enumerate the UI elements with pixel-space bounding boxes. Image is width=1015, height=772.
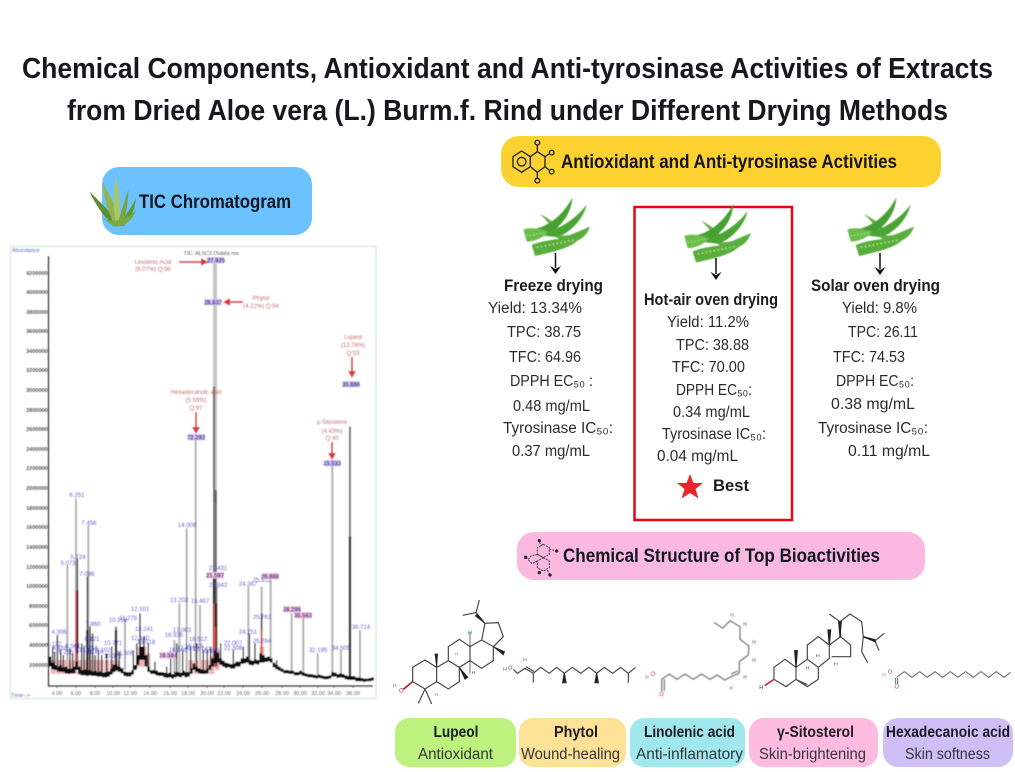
dense peak label clusters: 9.102 xyxy=(95,648,111,654)
peak labels: 10.771 xyxy=(104,641,123,647)
structure: phytol: H xyxy=(503,667,507,673)
dense peak label clusters: 18.015 xyxy=(185,644,204,650)
structure: linolenic acid: H xyxy=(743,622,747,628)
dense peak label clusters: 5.561 xyxy=(65,644,81,650)
peak labels: 25.784 xyxy=(253,639,272,645)
compound annotations: (4.43%) xyxy=(321,429,343,435)
panel: solar oven drying xyxy=(811,197,940,460)
peak labels: 12.101 xyxy=(131,607,150,613)
title xyxy=(22,53,993,127)
structure: lupeol: H xyxy=(468,630,472,636)
structure: linolenic acid: H xyxy=(729,686,733,692)
highlighted peak labels: 35.886 xyxy=(342,382,361,388)
compound annotations xyxy=(135,260,365,442)
panel: solar oven drying: TPC: 26.11 xyxy=(848,324,918,341)
card: gamma-sitosterol xyxy=(749,718,878,767)
chart: TIC chromatogram: 1800000 xyxy=(26,506,48,512)
compound annotations: (13.78%) xyxy=(341,343,365,349)
peak labels: 11.278 xyxy=(119,616,138,622)
chart: TIC chromatogram: 24.00 xyxy=(236,691,250,697)
highlighted peak labels: 30.563 xyxy=(294,614,313,620)
chart: TIC chromatogram: 22.00 xyxy=(217,691,231,697)
structure: linolenic acid: H xyxy=(752,640,756,646)
icon: molecule xyxy=(513,140,554,183)
structure: lupeol xyxy=(393,600,505,704)
dense peak label clusters xyxy=(46,636,243,660)
chart: TIC chromatogram: 8.00 xyxy=(90,691,100,697)
compound annotations: Q:40 xyxy=(325,436,339,442)
structure: linolenic acid: H xyxy=(730,613,734,619)
dense peak label clusters: 16.240 xyxy=(169,648,188,654)
peak labels: 15.467 xyxy=(191,599,210,605)
panel: solar oven drying: TFC: 74.53 xyxy=(833,349,905,366)
card: gamma-sitosterol: Skin-brightening xyxy=(759,746,866,763)
structure: gamma-sitosterol: H xyxy=(806,665,810,671)
compound annotations: Lupeol xyxy=(344,335,362,341)
panel: freeze drying: TPC: 38.75 xyxy=(507,324,581,341)
panel: freeze drying xyxy=(488,197,613,460)
chart: TIC chromatogram: 16.00 xyxy=(163,691,177,697)
dense peak label clusters: 12.640 xyxy=(131,636,150,642)
chart: TIC chromatogram: 32.00 xyxy=(311,691,325,697)
chart: TIC chromatogram: 2800000 xyxy=(26,408,48,414)
peak labels: 25.812 xyxy=(253,578,272,584)
structure: phytol xyxy=(503,658,636,683)
peak labels xyxy=(51,493,371,654)
peak labels: 21.431 xyxy=(209,566,228,572)
dense peak label clusters: 11.506 xyxy=(116,651,135,657)
chart: TIC chromatogram: 2400000 xyxy=(26,447,48,453)
icon: polycyclic structure xyxy=(524,539,558,577)
card: phytol: Phytol xyxy=(554,724,598,741)
structure: gamma-sitosterol: H xyxy=(816,653,820,659)
chart: TIC chromatogram: 10.00 xyxy=(106,691,120,697)
chart: TIC chromatogram: 18.00 xyxy=(181,691,195,697)
panel: TIC chromatogram heading xyxy=(89,167,312,235)
highlighted peak labels: 72.293 xyxy=(187,436,206,442)
chart: TIC chromatogram: 4200000 xyxy=(26,271,48,277)
compound annotations: γ-Sitosterol xyxy=(317,420,347,426)
icon: aloe slices xyxy=(684,204,751,262)
chart: TIC chromatogram: 3400000 xyxy=(26,349,48,355)
peak labels: 10.158 xyxy=(109,618,128,624)
compound annotations: (5.55%) xyxy=(185,398,207,404)
card: linolenic acid xyxy=(630,718,745,767)
structure: hexadecanoic acid: O xyxy=(894,685,899,691)
dense peak label clusters: 4.132 xyxy=(46,642,62,648)
structure: hexadecanoic acid xyxy=(882,669,1011,691)
chart: TIC chromatogram: 3600000 xyxy=(26,329,48,335)
chart: TIC chromatogram: 3000000 xyxy=(26,388,48,394)
card: hexadecanoic acid: Skin softness xyxy=(905,746,990,763)
panel: chemical structure heading: Chemical Structure of Top Bioactivities xyxy=(563,546,880,567)
structure: linolenic acid xyxy=(645,613,756,698)
chart: TIC chromatogram: 26.00 xyxy=(255,691,269,697)
dense peak label clusters: 6.814 xyxy=(74,648,90,654)
panel: solar oven drying: 0.38 mg/mL xyxy=(831,396,915,413)
chart: TIC chromatogram: 400000 xyxy=(29,643,48,649)
structure: hexadecanoic acid: H xyxy=(882,673,886,678)
dense peak label clusters: 4.458 xyxy=(52,646,68,652)
peak labels: 8.121 xyxy=(84,637,100,643)
structure: lupeol: H xyxy=(472,670,475,675)
panel: freeze drying: Tyrosinase IC₅₀: xyxy=(503,420,613,437)
compound annotations: (4.22%) Q:94 xyxy=(243,304,280,310)
compound annotations: Q:53 xyxy=(346,351,360,357)
annotation arrows xyxy=(179,258,356,460)
structure: hexadecanoic acid: O xyxy=(888,669,893,675)
chart: TIC chromatogram: Abundance xyxy=(12,248,40,254)
peak labels: 34.505 xyxy=(332,646,351,652)
compound annotations: Hexadecanoic acid xyxy=(171,390,221,396)
chart: TIC chromatogram xyxy=(10,246,376,699)
chart: TIC chromatogram: 200000 xyxy=(29,663,48,669)
peak labels: 13.203 xyxy=(170,598,189,604)
peak labels: 21.842 xyxy=(209,583,228,589)
title: from Dried Aloe vera (L.) Burm.f. Rind under Different Drying Methods xyxy=(67,95,948,127)
chart: TIC chromatogram: 14.00 xyxy=(143,691,157,697)
highlighted peak labels: 27.925 xyxy=(207,258,226,264)
chart: TIC chromatogram: 1600000 xyxy=(26,525,48,531)
arrow xyxy=(550,253,561,274)
peak labels: 16.835 xyxy=(165,633,184,639)
chart: TIC chromatogram: 4000000 xyxy=(26,290,48,296)
panel: TIC chromatogram heading: TIC Chromatogram xyxy=(139,192,291,213)
chart: TIC chromatogram: 600000 xyxy=(29,623,48,629)
panel: freeze drying: 0.48 mg/mL xyxy=(513,398,590,415)
dense peak label clusters: 18.742 xyxy=(193,647,212,653)
card: phytol xyxy=(519,718,626,767)
panel: freeze drying: TFC: 64.96 xyxy=(509,349,581,366)
card: lupeol: Lupeol xyxy=(434,724,478,741)
panel: solar oven drying: 0.11 mg/mL xyxy=(848,443,930,460)
compound annotations: Linolenic Acid xyxy=(135,260,171,266)
panel: solar oven drying: Tyrosinase IC₅₀: xyxy=(818,420,928,437)
structure: linolenic acid: H xyxy=(743,675,747,681)
structure: gamma-sitosterol xyxy=(759,614,884,691)
structure: lupeol: H xyxy=(393,684,397,690)
chart: TIC chromatogram: 1400000 xyxy=(26,545,48,551)
panel: hot-air oven drying (best): TPC: 38.88 xyxy=(676,337,749,354)
highlighted peak labels: 21.597 xyxy=(206,574,225,580)
highlighted peak labels: 19.584 xyxy=(159,654,178,660)
chart: TIC chromatogram: 34.00 xyxy=(327,691,341,697)
card: gamma-sitosterol: γ-Sitosterol xyxy=(777,724,854,741)
peak labels: 22.007 xyxy=(224,641,243,647)
chart: TIC chromatogram: 800000 xyxy=(29,604,48,610)
structure: lupeol: H xyxy=(435,692,438,697)
structure: gamma-sitosterol: H xyxy=(759,685,763,691)
panel: antioxidant heading xyxy=(501,136,941,187)
dense peak label clusters: 17.421 xyxy=(177,646,196,652)
highlighted peak labels: 28.837 xyxy=(204,300,223,306)
chromatogram trace xyxy=(53,257,360,679)
icon: aloe slices xyxy=(847,197,914,256)
dense peak label clusters: 22.308 xyxy=(224,646,243,652)
panel: solar oven drying: Yield: 9.8% xyxy=(842,300,917,317)
panel: freeze drying: Freeze drying xyxy=(504,277,603,295)
card: phytol: Wound-healing xyxy=(521,746,620,763)
structure: phytol: O xyxy=(508,665,513,671)
structure: lupeol: H xyxy=(455,652,458,657)
dense peak label clusters: 19.320 xyxy=(201,649,220,655)
structure: lupeol: O xyxy=(399,688,404,694)
panel: hot-air oven drying (best): Tyrosinase IC₅₀: xyxy=(662,426,766,443)
panel: hot-air oven drying (best): DPPH EC₅₀: xyxy=(676,382,752,399)
card: hexadecanoic acid xyxy=(883,718,1013,767)
card: lupeol: Antioxidant xyxy=(418,746,494,763)
compound annotations: (8.07%) Q:98 xyxy=(135,267,172,273)
panel: hot-air oven drying (best): 0.34 mg/mL xyxy=(673,404,750,421)
peak labels: 32.195 xyxy=(309,648,328,654)
structure: phytol: H xyxy=(523,658,527,664)
panel: solar oven drying: Solar oven drying xyxy=(811,277,940,295)
peak labels: 4.306 xyxy=(51,630,67,636)
chart: TIC chromatogram: 1000000 xyxy=(26,584,48,590)
compound annotations: Q:97 xyxy=(189,406,203,412)
chart: TIC chromatogram: 1200000 xyxy=(26,565,48,571)
compound annotations: Phytol xyxy=(253,296,269,302)
card: linolenic acid: Linolenic acid xyxy=(644,724,735,741)
structure: linolenic acid: H xyxy=(752,658,756,664)
highlighted peak labels xyxy=(159,257,361,660)
chart: TIC chromatogram: 12.00 xyxy=(123,691,137,697)
peak labels: 14.008 xyxy=(178,523,197,529)
panel: hot-air oven drying (best): Yield: 11.2% xyxy=(667,314,749,331)
peak labels: 7.860 xyxy=(85,622,101,628)
panel: antioxidant heading: Antioxidant and Anti-tyrosinase Activities xyxy=(561,152,897,173)
structure: linolenic acid: H xyxy=(645,675,649,681)
icon: star xyxy=(677,474,703,498)
dense peak label clusters: 7.754 xyxy=(82,646,98,652)
dense peak label clusters: 5.255 xyxy=(58,650,74,656)
chart: TIC chromatogram: 28.00 xyxy=(275,691,289,697)
peak labels: 5.724 xyxy=(70,555,86,561)
chart: TIC chromatogram: 2200000 xyxy=(26,466,48,472)
chart: TIC chromatogram: TIC: AL5C2.D\data.ms xyxy=(183,251,239,257)
panel: freeze drying: DPPH EC₅₀ : xyxy=(510,373,593,390)
structure: linolenic acid: O xyxy=(651,672,656,678)
chart: TIC chromatogram: 2600000 xyxy=(26,427,48,433)
peak labels: 13.241 xyxy=(135,627,154,633)
peak labels: 5.073 xyxy=(60,561,76,567)
dense peak label clusters: 13.018 xyxy=(137,640,156,646)
highlighted peak labels: 33.533 xyxy=(323,462,342,468)
icon: aloe plant xyxy=(89,177,136,227)
panel: hot-air oven drying (best): TFC: 70.00 xyxy=(672,359,745,376)
peak labels: 17.003 xyxy=(173,628,192,634)
peak labels: 24.751 xyxy=(239,630,258,636)
dense peak label clusters: 8.310 xyxy=(88,650,104,656)
chart: TIC chromatogram: 30.00 xyxy=(293,691,307,697)
chart: TIC chromatogram: 6.00 xyxy=(71,691,81,697)
structure: linolenic acid: O xyxy=(659,692,664,698)
chart: TIC chromatogram: 36.00 xyxy=(346,691,360,697)
peak labels: 36.714 xyxy=(352,625,371,631)
panel: freeze drying: Yield: 13.34% xyxy=(488,300,582,317)
chart: TIC chromatogram: 4.00 xyxy=(52,691,62,697)
peak labels: 7.096 xyxy=(79,572,95,578)
dense peak label clusters: 10.322 xyxy=(104,654,123,660)
panel: chemical structure heading xyxy=(517,532,925,580)
peak labels: 6.251 xyxy=(69,493,85,499)
icon: aloe slices xyxy=(523,197,590,256)
chart: TIC chromatogram: 3200000 xyxy=(26,368,48,374)
highlighted peak labels: 26.888 xyxy=(261,574,280,580)
dense peak label clusters: 18.512 xyxy=(189,637,208,643)
chart: TIC chromatogram: 20.00 xyxy=(200,691,214,697)
chart: TIC chromatogram: 3800000 xyxy=(26,310,48,316)
panel: solar oven drying: DPPH EC₅₀: xyxy=(836,373,914,390)
baseline xyxy=(50,647,373,682)
highlighted peak labels: 28.296 xyxy=(283,608,302,614)
card: linolenic acid: Anti-inflamatory xyxy=(636,746,743,763)
peak labels: 25.761 xyxy=(253,615,272,621)
panel: hot-air oven drying (best): 0.04 mg/mL xyxy=(657,448,738,465)
panel: freeze drying: 0.37 mg/mL xyxy=(512,443,590,460)
chart: TIC chromatogram: Time--> xyxy=(11,693,30,699)
panel: hot-air oven drying (best) xyxy=(634,204,792,520)
structure: gamma-sitosterol: H xyxy=(834,661,838,667)
peak labels: 24.367 xyxy=(239,582,258,588)
arrow xyxy=(874,253,886,275)
peak labels: 7.456 xyxy=(81,521,97,527)
panel: hot-air oven drying (best): Hot-air oven drying xyxy=(644,291,778,309)
arrow xyxy=(710,258,722,280)
panel: hot-air oven drying (best): Best xyxy=(713,477,750,495)
chart: TIC chromatogram: 2000000 xyxy=(26,486,48,492)
card: lupeol xyxy=(395,718,516,767)
